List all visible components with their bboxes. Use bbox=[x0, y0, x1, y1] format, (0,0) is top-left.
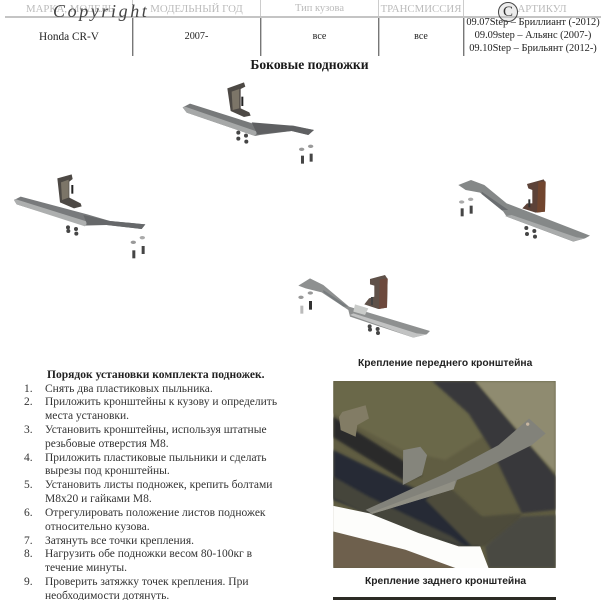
table header row: Тип кузова bbox=[295, 3, 344, 14]
title: Боковые подножки bbox=[250, 57, 369, 72]
instructions list: Приложить кронштейны к кузову и определить bbox=[45, 396, 277, 408]
table data row: все bbox=[414, 31, 428, 42]
table data row bbox=[39, 17, 600, 54]
instructions list bbox=[24, 383, 277, 600]
instructions list: Установить листы подножек, крепить болтами bbox=[45, 479, 272, 491]
table data row: 09.09step – Альянс (2007-) bbox=[475, 30, 591, 41]
table data row: 2007- bbox=[185, 31, 208, 42]
instructions list: Установить кронштейны, используя штатные bbox=[45, 424, 267, 436]
instructions list: 8. bbox=[24, 548, 33, 560]
instructions list: М8х20 и гайками М8. bbox=[45, 493, 152, 505]
caption: rear bracket: Крепление заднего кронштейна bbox=[365, 576, 526, 587]
table data row: все bbox=[313, 31, 326, 42]
instructions list: вырезы под кронштейны. bbox=[45, 465, 170, 477]
table data row: Honda CR-V bbox=[39, 31, 99, 43]
copyright symbol bbox=[498, 2, 518, 22]
instructions list: Затянуть все точки крепления. bbox=[45, 535, 194, 547]
photo: front bracket bbox=[333, 381, 556, 568]
caption: front bracket: Крепление переднего кронштейна bbox=[358, 358, 532, 369]
instructions list: Отрегулировать положение листов подножек bbox=[45, 507, 266, 519]
instructions list: места установки. bbox=[45, 410, 129, 422]
table header row: МОДЕЛЬНЫЙ ГОД bbox=[150, 3, 243, 15]
instructions list: Снять два пластиковых пыльника. bbox=[45, 383, 213, 395]
diagram: left step board bbox=[14, 174, 145, 258]
instructions list: течение минуты. bbox=[45, 562, 127, 574]
instructions heading: Порядок установки комплекта подножек. bbox=[47, 369, 265, 381]
instructions list: Приложить пластиковые пыльники и сделать bbox=[45, 452, 267, 464]
instructions list: 9. bbox=[24, 576, 33, 588]
copyright symbol: C bbox=[503, 4, 513, 20]
table grid lines bbox=[5, 0, 601, 56]
table header row: МАРКА, МОДЕЛЬ bbox=[26, 3, 114, 15]
photo: rear bracket bbox=[333, 597, 556, 600]
instructions list: относительно кузова. bbox=[45, 521, 150, 533]
diagram: right step board bbox=[458, 179, 590, 242]
instructions list: резьбовые отверстия М8. bbox=[45, 438, 169, 450]
copyright watermark: Copyright bbox=[53, 1, 149, 21]
instructions list: 4. bbox=[24, 452, 33, 464]
instructions list: 3. bbox=[24, 424, 33, 436]
table header row: ТРАНСМИССИЯ bbox=[381, 3, 461, 15]
instructions list: 6. bbox=[24, 507, 33, 519]
instructions list: 5. bbox=[24, 479, 33, 491]
table header row bbox=[26, 3, 567, 15]
instructions list: 7. bbox=[24, 535, 33, 547]
diagram: bottom step board bbox=[298, 275, 430, 338]
instructions list: 1. bbox=[24, 383, 33, 395]
instructions list: 2. bbox=[24, 396, 33, 408]
diagrams bbox=[14, 82, 590, 338]
instructions list: Нагрузить обе подножки весом 80-100кг в bbox=[45, 548, 252, 560]
diagram: top step board bbox=[183, 82, 314, 164]
table data row: 09.10Step – Брильянт (2012-) bbox=[469, 43, 597, 54]
table header row: АРТИКУЛ bbox=[517, 3, 567, 15]
instructions list: Проверить затяжку точек крепления. При bbox=[45, 576, 249, 588]
table data row: 09.07Step – Бриллиант (-2012) bbox=[466, 17, 600, 28]
